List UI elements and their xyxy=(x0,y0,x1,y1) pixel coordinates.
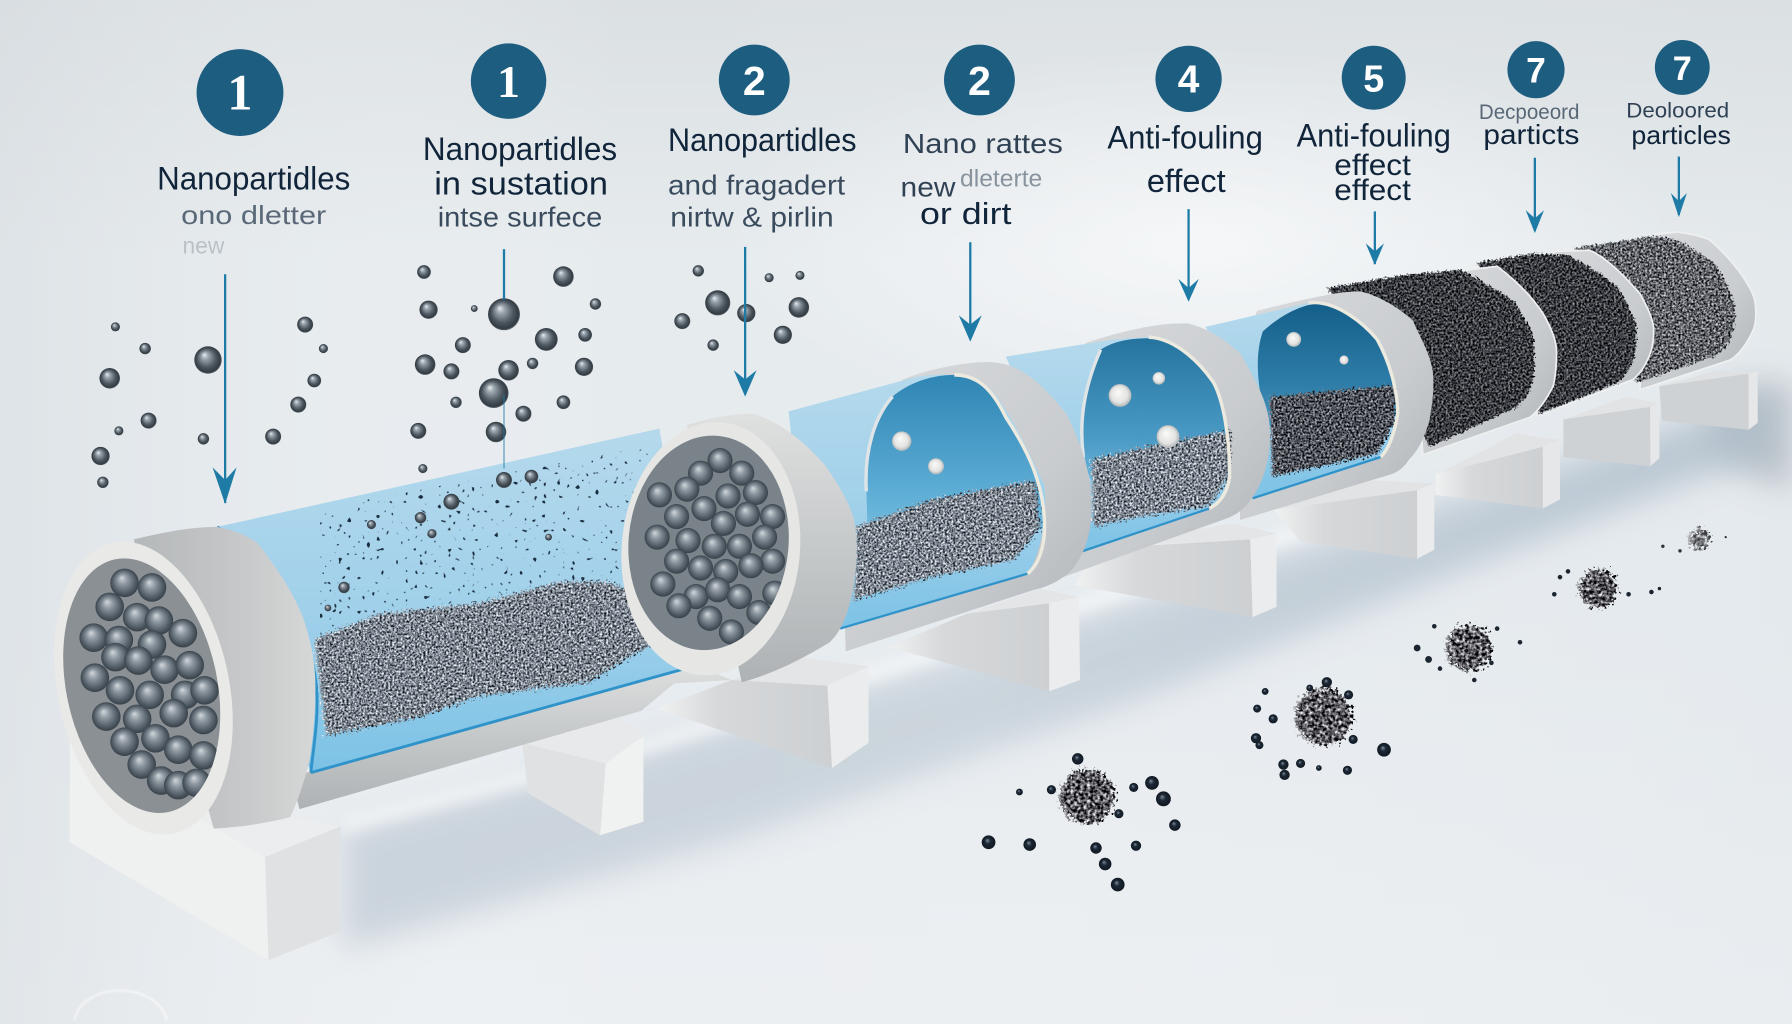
larger specks xyxy=(325,470,552,611)
badge 3: 2 xyxy=(743,58,766,104)
arrow 8 xyxy=(1671,157,1687,217)
badge 3 xyxy=(719,45,790,115)
gravel bed 4 xyxy=(1270,385,1395,477)
step 8 xyxy=(1626,40,1731,217)
debris cluster 2 xyxy=(1251,677,1391,780)
badge 4: 2 xyxy=(968,58,991,104)
label 1: Nanopartidles xyxy=(157,161,350,197)
badge 1 xyxy=(197,49,283,136)
support 3 xyxy=(657,657,869,768)
badge 2 xyxy=(471,43,546,119)
badge 1: 1 xyxy=(227,65,253,121)
ring 1 band xyxy=(134,527,315,829)
arrow 6 xyxy=(1366,211,1384,265)
arrow 2 xyxy=(503,249,505,469)
ring 7 xyxy=(1537,250,1654,416)
arrow 7 xyxy=(1526,158,1544,233)
support 1 xyxy=(70,743,341,960)
section 3 window xyxy=(1006,337,1231,557)
label 4: Nano rattes xyxy=(903,128,1063,159)
arrow 3 xyxy=(734,247,757,397)
label 8: Deoloored xyxy=(1626,98,1729,123)
label 5: effect xyxy=(1147,163,1226,199)
label 6: Anti-fouling xyxy=(1297,117,1451,153)
section 5 coated surface xyxy=(1327,270,1535,447)
step 2 xyxy=(423,43,617,469)
label 3: Nanopartidles xyxy=(668,122,857,158)
badge 2: 1 xyxy=(497,56,520,107)
arrow 4 xyxy=(959,242,982,342)
label 4: or dirt xyxy=(920,196,1012,231)
suspended particles 3 xyxy=(1109,372,1179,448)
gravel bed 3 xyxy=(1091,430,1231,527)
light under pipe xyxy=(343,497,1406,825)
support 2 xyxy=(522,718,643,835)
floor shadow xyxy=(343,394,1766,949)
support 9 xyxy=(1659,371,1758,430)
ring 6 xyxy=(1417,266,1557,455)
pipe xyxy=(29,232,1756,851)
label 4 xyxy=(901,128,1063,231)
debris on floor xyxy=(982,529,1727,891)
section 7 coated surface xyxy=(1574,237,1735,383)
label 5 xyxy=(1107,120,1263,199)
badge 8 xyxy=(1655,40,1710,95)
label 7: particts xyxy=(1483,119,1579,150)
balls in ring 2 xyxy=(645,448,787,645)
badge 7: 7 xyxy=(1526,50,1546,90)
arrow 5 xyxy=(1178,209,1199,302)
label 2: in sustation xyxy=(434,165,608,201)
step 6 xyxy=(1297,46,1451,265)
badge 8: 7 xyxy=(1673,50,1692,88)
badge 6 xyxy=(1342,46,1406,110)
label 2: intse surfece xyxy=(438,201,602,232)
label 6 xyxy=(1297,117,1451,207)
suspended particles 4 xyxy=(1286,332,1349,365)
ring 8 end cap xyxy=(1640,232,1756,390)
badge 5: 4 xyxy=(1178,59,1200,102)
label 2 xyxy=(423,131,617,232)
badge 5 xyxy=(1155,46,1222,112)
label 3 xyxy=(668,122,857,232)
ring 5 xyxy=(1240,291,1433,520)
support blocks xyxy=(70,371,1758,960)
support 7 xyxy=(1435,433,1560,509)
label 3: and fragadert xyxy=(668,169,846,200)
label 6: effect xyxy=(1334,149,1412,182)
label 8: particles xyxy=(1631,120,1731,150)
label 5: Anti-fouling xyxy=(1107,120,1263,156)
label 1 xyxy=(157,161,350,259)
section 1 glass xyxy=(217,429,697,773)
particle cluster 3 xyxy=(674,265,809,351)
lower pipe wall section 1 xyxy=(291,661,731,809)
badge 6: 5 xyxy=(1363,57,1384,99)
arrow 1 xyxy=(213,274,237,504)
ring 2 face xyxy=(621,422,800,675)
ring 4 xyxy=(1057,323,1270,577)
label 7 xyxy=(1479,99,1579,150)
gravel bed 2 xyxy=(854,480,1040,600)
debris cluster 1 xyxy=(982,753,1181,891)
debris cluster 5 xyxy=(1661,529,1727,553)
debris cluster 3 xyxy=(1414,624,1522,682)
support 5 xyxy=(1074,523,1277,617)
window 3 edge xyxy=(1149,337,1230,509)
label 6: effect xyxy=(1334,174,1412,207)
badge 7 xyxy=(1507,41,1565,98)
window 4 edge xyxy=(1309,303,1398,457)
debris cluster 4 xyxy=(1552,569,1661,608)
section 4 window xyxy=(1206,303,1398,498)
step 5 xyxy=(1107,46,1263,302)
label 1: ono dletter xyxy=(181,200,327,230)
falling particles xyxy=(91,265,809,488)
label 1: new xyxy=(182,233,225,259)
label 8 xyxy=(1626,98,1731,150)
ring 2 xyxy=(687,414,857,682)
window 2 edge xyxy=(954,375,1045,574)
step 3 xyxy=(668,45,857,397)
label 4: new xyxy=(901,172,956,203)
label 4: dleterte xyxy=(960,165,1042,192)
label 3: nirtw & pirlin xyxy=(670,201,834,232)
floating specks xyxy=(320,446,651,640)
support 8 xyxy=(1563,397,1659,466)
balls in ring 1 xyxy=(79,569,219,799)
badge 4 xyxy=(944,45,1015,115)
gravel bed 1 xyxy=(314,582,671,736)
ring 1 face xyxy=(54,543,233,813)
ring 3 xyxy=(840,362,1092,651)
particle cluster 2 xyxy=(410,265,601,473)
suspended particles 2 xyxy=(892,431,944,474)
label 7: Decpoeord xyxy=(1479,99,1579,124)
section 6 coated surface xyxy=(1477,254,1637,414)
support 6 xyxy=(1274,480,1434,559)
section 2 window xyxy=(789,375,1045,632)
support 4 xyxy=(888,589,1080,691)
step 7 xyxy=(1479,41,1579,233)
particle cluster 1 xyxy=(91,317,328,488)
label 2: Nanopartidles xyxy=(423,131,617,167)
step 4 xyxy=(901,45,1063,342)
step 1 xyxy=(157,49,350,504)
